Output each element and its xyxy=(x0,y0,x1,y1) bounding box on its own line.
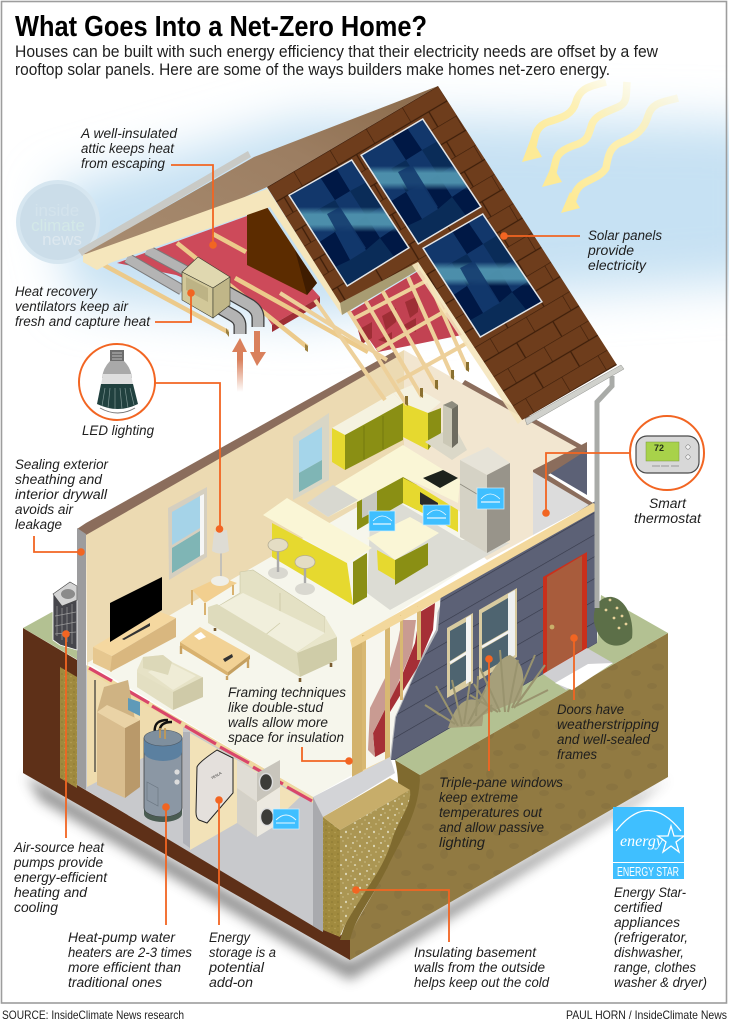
fascia xyxy=(83,189,270,270)
floor joist strip xyxy=(87,665,313,803)
label: sealing xyxy=(15,457,108,532)
label: heat-pump water heaters: heaters are 2-3 times xyxy=(68,945,192,960)
label: doors: Doors have xyxy=(557,702,624,717)
label: air-source heat pumps xyxy=(13,840,108,915)
icon: Energy Star logo: ENERGY STAR xyxy=(617,865,679,879)
label: Energy Star appliances: Energy Star- xyxy=(614,885,686,900)
watermark: InsideClimate News logo xyxy=(16,180,100,264)
icon: air-source heat pump xyxy=(53,582,77,650)
label: triple-pane windows: temperatures out xyxy=(439,805,543,820)
kitchen floor xyxy=(367,503,510,610)
label: energy storage: storage is a xyxy=(209,945,276,960)
label: sealing: avoids air xyxy=(15,502,74,517)
foundation and soil block xyxy=(23,612,668,960)
label: framing techniques: like double-stud xyxy=(228,700,323,715)
roof rafters over the opening xyxy=(350,270,462,352)
label: heat recovery ventilators: ventilators keep air xyxy=(15,299,128,314)
sofa right arm xyxy=(297,637,337,677)
solar panel right xyxy=(420,213,550,338)
bar stools xyxy=(268,538,315,595)
label: basement insulation: Insulating basement xyxy=(414,945,537,960)
label: heat-pump water heaters: traditional ones xyxy=(68,975,162,990)
label: solar panels: Solar panels xyxy=(588,228,662,243)
label: doors: weatherstripping xyxy=(557,717,659,732)
label: heat-pump water heaters: more efficient than xyxy=(68,960,181,975)
label: Energy Star appliances: certified xyxy=(614,900,662,915)
label: sealing: sheathing and xyxy=(15,472,102,487)
refrigerator xyxy=(460,447,510,553)
label: framing techniques: space for insulation xyxy=(228,730,344,745)
watermark: InsideClimate News logo: climate xyxy=(31,216,85,235)
icon: LED bulb callout xyxy=(79,344,155,420)
label: solar panels xyxy=(587,228,662,273)
label: attic insulation: attic keeps heat xyxy=(81,141,175,156)
label: basement insulation xyxy=(414,945,549,990)
label: air-source heat pumps: heating and xyxy=(14,885,87,900)
label: heat recovery ventilators xyxy=(15,284,151,329)
label: air-source heat pumps: Air-source heat xyxy=(13,840,105,855)
icon: Energy Star logo: energy xyxy=(620,833,664,850)
front gutter xyxy=(525,365,624,425)
shrubs xyxy=(425,650,548,728)
island xyxy=(367,517,439,585)
icon: Energy Star logo xyxy=(613,807,684,879)
ventilator ducts xyxy=(127,250,258,334)
label: sealing: Sealing exterior xyxy=(15,457,108,472)
range hood xyxy=(425,401,467,460)
watermark: InsideClimate News logo: news xyxy=(42,230,82,249)
solar panel left xyxy=(285,159,415,287)
door xyxy=(543,552,613,690)
label: air-source heat pumps: pumps provide xyxy=(13,855,103,870)
label: framing techniques xyxy=(228,685,346,745)
solar panel top xyxy=(358,118,488,245)
gutter and roof edge xyxy=(78,151,251,256)
label: attic insulation: A well-insulated xyxy=(80,126,178,141)
label: heat recovery ventilators: fresh and capture heat xyxy=(15,314,151,329)
roof underside tan xyxy=(84,86,438,258)
label: triple-pane windows: and allow passive xyxy=(439,820,544,835)
label: triple-pane windows xyxy=(439,775,563,850)
upper cabinets xyxy=(332,385,441,470)
Energy Star labels on kitchen appliances xyxy=(369,488,504,531)
title: What Goes Into a Net-Zero Home? xyxy=(15,11,427,43)
base cabinets and counter xyxy=(307,445,460,532)
ceiling joists xyxy=(100,234,368,352)
front wall: siding xyxy=(350,500,597,760)
label: basement insulation: walls from the outside xyxy=(414,960,545,975)
water heater xyxy=(144,720,182,822)
home battery: TESLA xyxy=(210,771,223,780)
label: attic insulation xyxy=(80,126,178,171)
intro text: rooftop solar panels. Here are some of the ways builders make homes net-zero energy. xyxy=(15,61,610,79)
label: triple-pane windows: lighting xyxy=(439,835,486,850)
label: air-source heat pumps: energy-efficient xyxy=(14,870,108,885)
icon: smart thermostat callout xyxy=(630,416,704,490)
label: attic insulation: from escaping xyxy=(81,156,165,171)
grass strip xyxy=(395,595,668,775)
attic insulation xyxy=(117,216,320,325)
triple-pane windows xyxy=(447,588,517,698)
coffee table xyxy=(180,627,250,680)
label: energy storage: potential xyxy=(208,960,265,975)
attic underside and trusses xyxy=(100,207,469,406)
label: smart thermostat: thermostat xyxy=(634,511,702,526)
label: solar panels: electricity xyxy=(588,258,647,273)
label: air-source heat pumps: cooling xyxy=(14,900,59,915)
home battery xyxy=(196,750,233,823)
exposed wall framing xyxy=(352,594,440,777)
label: Energy Star appliances xyxy=(614,885,707,990)
label: heat recovery ventilators: Heat recovery xyxy=(15,284,98,299)
label: solar panels: provide xyxy=(587,243,634,258)
basement interior xyxy=(86,665,323,932)
label: heat-pump water heaters xyxy=(68,930,192,990)
label: framing techniques: Framing techniques xyxy=(228,685,346,700)
dark attic knee wall xyxy=(247,207,317,295)
label: Energy Star appliances: washer & dryer) xyxy=(614,975,707,990)
downspout xyxy=(597,376,612,608)
foundation wall and exterior foam insulation xyxy=(313,757,410,937)
label: basement insulation: helps keep out the cold xyxy=(414,975,549,990)
icon: airflow arrows xyxy=(232,338,247,392)
label: doors: and well-sealed xyxy=(557,732,650,747)
label: smart thermostat: Smart xyxy=(649,496,687,511)
bar counter xyxy=(263,498,372,605)
label: heat-pump water heaters: Heat-pump water xyxy=(68,930,176,945)
sofa back xyxy=(217,570,325,655)
callout leader lines xyxy=(34,165,630,942)
label: energy storage xyxy=(208,930,276,990)
label: Energy Star appliances: range, clothes xyxy=(614,960,696,975)
sofa seat xyxy=(217,593,325,652)
window: kitchen xyxy=(293,413,329,500)
armchair xyxy=(137,655,203,710)
label: sealing: leakage xyxy=(15,517,62,532)
label: sealing: interior drywall xyxy=(15,487,108,502)
intro text: Houses can be built with such energy efficiency that their electricity needs are offset by a few xyxy=(15,43,658,61)
label: LED lighting: LED lighting xyxy=(82,423,154,438)
label: Energy Star appliances: dishwasher, xyxy=(614,945,684,960)
label: framing techniques: walls allow more xyxy=(228,715,328,730)
icon: sun rays xyxy=(522,82,678,213)
furnace xyxy=(95,680,140,798)
heat recovery ventilator box xyxy=(182,257,230,318)
living floor xyxy=(87,480,510,797)
icon: smart thermostat callout: 72 xyxy=(654,443,664,453)
back walls xyxy=(77,350,593,790)
label: smart thermostat xyxy=(634,496,702,526)
shingles xyxy=(267,86,617,420)
ground shadow xyxy=(26,775,668,980)
bush xyxy=(594,597,632,646)
solar panels xyxy=(285,118,550,338)
watermark: InsideClimate News logo: inside xyxy=(35,201,79,220)
label: doors xyxy=(557,702,659,762)
TV and media stand xyxy=(93,577,176,672)
sofa front xyxy=(208,604,300,677)
sofa xyxy=(208,570,337,682)
washer and dryer xyxy=(237,760,299,837)
label: triple-pane windows: Triple-pane windows xyxy=(439,775,563,790)
label: doors: frames xyxy=(557,747,597,762)
intro text xyxy=(15,43,658,79)
roof xyxy=(78,86,624,425)
kitchen xyxy=(263,385,510,605)
label: Energy Star appliances: (refrigerator, xyxy=(614,930,688,945)
label: energy storage: Energy xyxy=(209,930,251,945)
label: energy storage: add-on xyxy=(209,975,253,990)
window: living room xyxy=(168,487,207,580)
floor lamp and side table xyxy=(192,530,237,615)
source line: SOURCE: InsideClimate News research xyxy=(2,1008,184,1022)
label: triple-pane windows: keep extreme xyxy=(439,790,518,805)
label: Energy Star appliances: appliances xyxy=(614,915,680,930)
